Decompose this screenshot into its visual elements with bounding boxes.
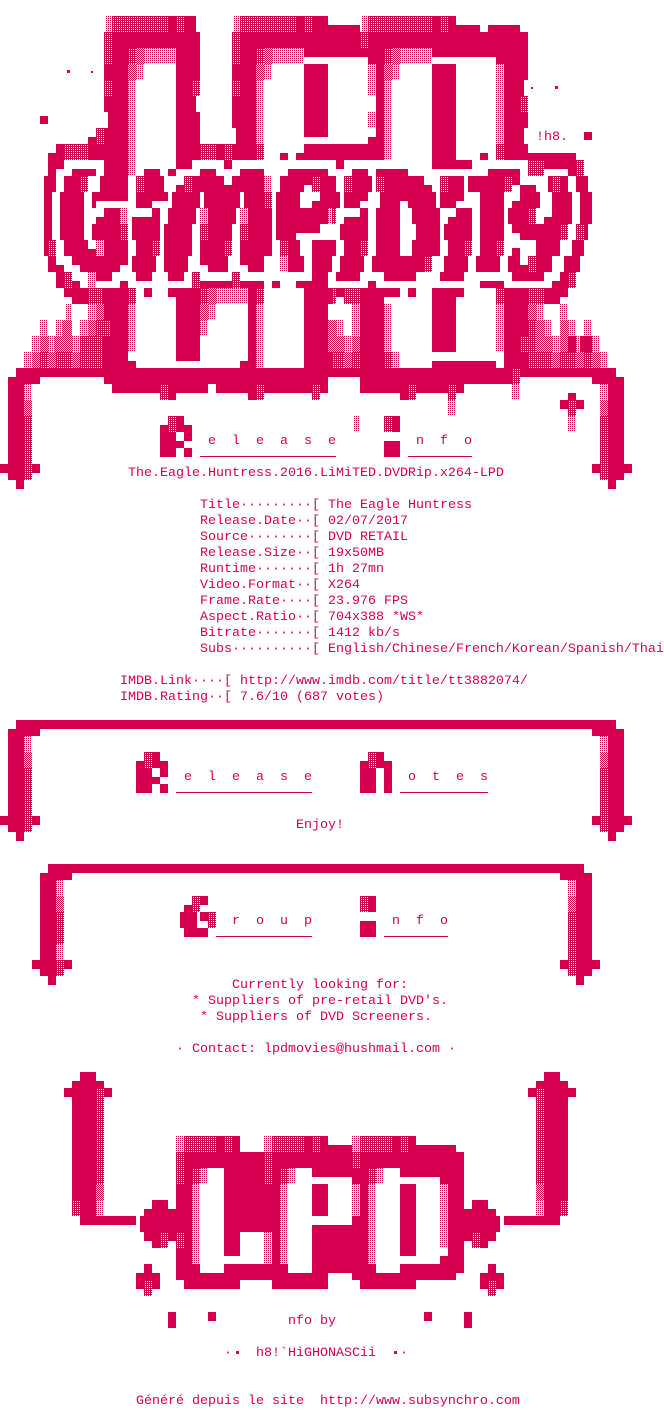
logo stray pixels <box>40 70 592 160</box>
logo solid blocks <box>16 16 616 400</box>
footer: source site: Généré depuis le site http://www.subsynchro.com <box>136 1394 520 1409</box>
logo checker dither <box>32 48 600 368</box>
bottom logo light dither <box>96 1136 544 1264</box>
heading: group info: n f o <box>392 914 448 929</box>
bottom logo solid blocks <box>64 1072 576 1328</box>
heading blocks: group info <box>180 896 448 937</box>
text: logo tag: !h8. <box>536 130 568 145</box>
text: looking for: Currently looking for: <box>232 978 408 993</box>
text: author: · h8!`HiGHONASCii · <box>224 1346 408 1361</box>
heading: release: e l e a s e <box>184 770 312 785</box>
frame: release info bracket <box>0 377 632 489</box>
text: release name: The.Eagle.Huntress.2016.LiMiTED.DVDRip.x264-LPD <box>128 466 504 481</box>
contact line ornaments <box>236 1351 397 1354</box>
icon: cross ornament <box>560 393 584 432</box>
frame: release notes bracket <box>0 720 632 841</box>
imdb details: IMDB.Link····[ http://www.imdb.com/title/tt3882074/ IMDB.Rating··[ 7.6/10 (687 votes) <box>120 674 528 705</box>
heading: info: n f o <box>416 434 472 449</box>
bottom logo: LPD <box>64 1072 576 1328</box>
text: nfo by: nfo by <box>288 1314 336 1329</box>
bottom logo checker dither <box>96 1184 544 1200</box>
frame: group info bracket <box>32 864 600 985</box>
text: release notes: Enjoy! <box>296 818 344 833</box>
release details table: Title·········[ The Eagle Huntress Release.Date··[ 02/07/2017 Source········[ DVD RETAIL Release.Size··[ 19x50MB Runtime·······[ 1h 27mn Video.Format··[ X264 Frame.Rate····[ 23.976 FPS Aspect.Ratio··[ 704x388 *WS* Bitrate·······[ 1412 kb/s Subs··········[ English/Chinese/French/Korean/Spanish/Thai <box>200 498 664 657</box>
heading blocks: release notes <box>136 752 488 793</box>
heading: group: r o u p <box>232 914 312 929</box>
heading blocks: release info <box>160 416 472 457</box>
logo dark dither <box>40 16 592 400</box>
text: contact: · Contact: lpdmovies@hushmail.com · <box>176 1042 456 1057</box>
bottom logo dark dither <box>72 1088 568 1296</box>
text: supplier screeners: * Suppliers of DVD Screeners. <box>200 1010 432 1025</box>
logo light dither <box>24 16 608 416</box>
top logo: LPD / GiMPiDiTS ascii art <box>16 16 616 416</box>
heading: notes: o t e s <box>408 770 488 785</box>
heading: release info: e l e a s e <box>208 434 336 449</box>
text: supplier pre-retail: * Suppliers of pre-retail DVD's. <box>192 994 448 1009</box>
